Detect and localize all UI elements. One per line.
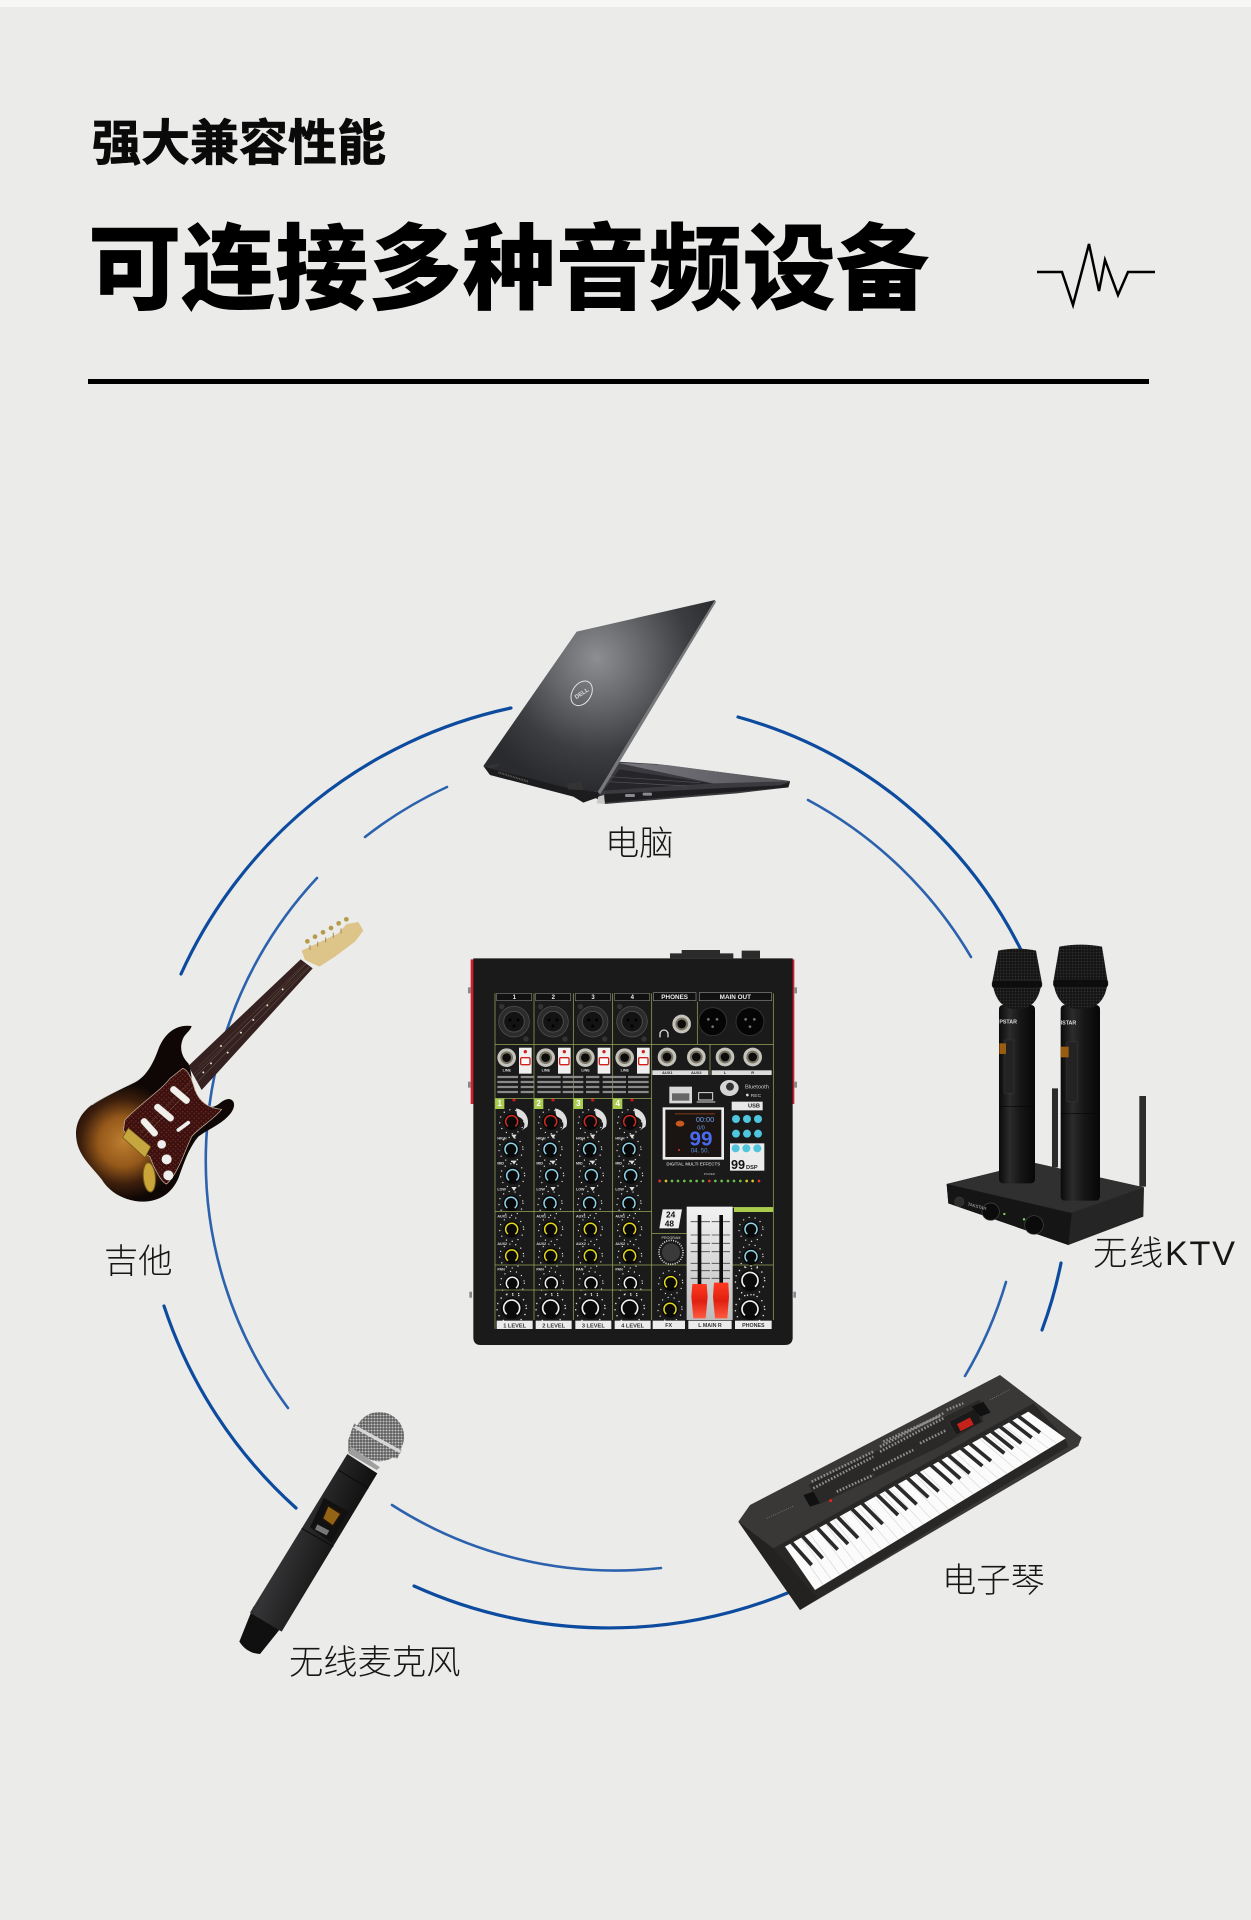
laptop keyboard: [603, 769, 712, 791]
level labels: 1 LEVEL: [503, 1323, 527, 1329]
channel control labels: [497, 1068, 630, 1272]
right microphone: ISTAR: [1061, 1021, 1076, 1027]
channel control labels: PAN: [497, 1268, 505, 1272]
level labels: 3 LEVEL: [582, 1323, 605, 1329]
channel control labels: MID: [615, 1162, 622, 1166]
channel control labels: HIGH: [615, 1136, 625, 1140]
channel control labels: MID: [497, 1162, 504, 1166]
laptop lid: [483, 600, 715, 792]
usb and bluetooth panel: REC: [751, 1093, 762, 1099]
label: electronic keyboard: 电子琴: [942, 1562, 1045, 1600]
channel number text: 4: [615, 1099, 620, 1108]
LED level meter: [658, 1172, 760, 1182]
phones and main out section: PHONES: [661, 994, 688, 1001]
cyan control buttons: 99: [731, 1158, 745, 1172]
cyan control buttons: [730, 1115, 764, 1172]
channel number text: 1: [513, 995, 517, 1001]
channel control labels: AUX1: [615, 1214, 625, 1218]
display: [949, 1408, 982, 1435]
phones and main out section: L: [724, 1070, 727, 1075]
effect parameter table: [497, 1077, 651, 1092]
24/48 badge: 48: [665, 1219, 674, 1229]
channel control labels: PAN: [615, 1268, 623, 1272]
icon: laptop logo: [567, 677, 597, 710]
speaker grilles: [767, 1389, 1010, 1518]
bottom function labels: PHONES: [742, 1323, 765, 1329]
channel control labels: LOW: [615, 1188, 624, 1192]
channel control labels: LINE: [503, 1068, 512, 1072]
label: guitar: 吉他: [104, 1243, 173, 1281]
channel control labels: AUX2: [536, 1242, 546, 1246]
keyboard body: [738, 1375, 1082, 1610]
channel control labels: MID: [576, 1162, 583, 1166]
main title: 可连接多种音频设备: [88, 217, 930, 322]
channel control labels: AUX2: [497, 1242, 507, 1246]
channel control labels: AUX1: [497, 1214, 507, 1218]
label: wireless microphone: 无线麦克风: [289, 1644, 460, 1682]
LCD display: 04. 50.: [691, 1149, 709, 1155]
LED level meter: POWER: [704, 1172, 716, 1176]
channel control labels: PAN: [576, 1268, 584, 1272]
laptop: [483, 600, 790, 804]
mixer: [468, 950, 797, 1345]
guitar strings: [140, 963, 310, 1137]
channel control labels: MID: [536, 1162, 543, 1166]
channel number text: 3: [591, 995, 595, 1001]
guitar jack plate: [142, 1162, 157, 1192]
receiver base: [947, 1163, 1144, 1245]
channel number text: 3: [576, 1099, 581, 1108]
laptop base: [593, 762, 790, 804]
LCD display: 99: [690, 1127, 712, 1150]
usb and bluetooth panel: Bluetooth: [745, 1085, 769, 1091]
connection arcs: [164, 708, 1061, 1628]
channel control labels: LINE: [542, 1068, 551, 1072]
white keys: [785, 1412, 1066, 1590]
red fader caps: [691, 1284, 708, 1318]
LCD display: [663, 1107, 724, 1160]
level labels: [503, 1323, 645, 1329]
level labels: 2 LEVEL: [542, 1323, 566, 1329]
subtitle heading: 强大兼容性能: [92, 117, 386, 171]
left microphone: [992, 949, 1042, 1183]
channel control labels: LOW: [497, 1188, 506, 1192]
wireless KTV microphones: [947, 945, 1146, 1245]
channel control labels: HIGH: [576, 1136, 585, 1140]
channel control labels: LOW: [576, 1188, 585, 1192]
channel control labels: AUX1: [536, 1214, 546, 1218]
bottom function labels: FX: [665, 1323, 673, 1329]
icon: audio pulse waveform: [1037, 244, 1155, 305]
digital multi effects caption: DIGITAL MULTI EFFECTS: [666, 1162, 720, 1167]
channel control labels: PAN: [536, 1268, 544, 1272]
mixer screws: [468, 987, 797, 1298]
black keys: [792, 1415, 1040, 1565]
channel control labels: HIGH: [536, 1136, 546, 1140]
channel control labels: LINE: [621, 1068, 630, 1072]
phones and main out section: AUX1: [662, 1070, 673, 1075]
master EQ and phones knobs: [734, 1207, 773, 1324]
label: computer: 电脑: [605, 825, 674, 863]
control panel: [808, 1399, 983, 1504]
channel control labels: HIGH: [497, 1136, 507, 1140]
microphone head: [348, 1412, 404, 1470]
fx aux knobs: [658, 1271, 683, 1321]
cyan control buttons: DSP: [746, 1165, 758, 1171]
channel number text: 1: [497, 1099, 502, 1108]
channel number text: 4: [631, 995, 635, 1001]
guitar bridge: [123, 1128, 151, 1158]
program encoder: PROGRAM: [662, 1236, 680, 1240]
guitar pickguard: [123, 1068, 222, 1184]
channel control labels: LINE: [581, 1068, 590, 1072]
laptop hinge edge: [483, 766, 600, 803]
handheld wireless microphone: [239, 1412, 404, 1654]
phones and main out section: [652, 993, 772, 1075]
mixer body: [473, 958, 793, 1345]
panel grid lines: [495, 993, 773, 1329]
guitar: [76, 917, 363, 1202]
antennas: [1052, 1088, 1146, 1187]
receiver controls: TAKSTAR: [967, 1201, 987, 1211]
channel control labels: AUX2: [576, 1242, 586, 1246]
bottom function labels: L MAIN R: [698, 1323, 722, 1329]
channel control labels: AUX2: [615, 1242, 625, 1246]
guitar knobs: [157, 1140, 173, 1180]
microphone tail: [239, 1607, 283, 1654]
main fader panel: [687, 1207, 733, 1320]
LCD display: 00:00: [696, 1115, 714, 1124]
phones and main out section: MAIN OUT: [720, 994, 751, 1001]
bottom function labels: [653, 1321, 772, 1329]
guitar pickups: [139, 1085, 191, 1138]
pitch wheels: [803, 1402, 991, 1507]
LCD display: 0/0: [697, 1125, 705, 1131]
label: wireless KTV: 无线KTV: [1093, 1235, 1235, 1273]
left microphone: PSTAR: [999, 1019, 1017, 1025]
right microphone: [1053, 945, 1108, 1201]
level labels: 4 LEVEL: [621, 1323, 645, 1329]
icon: laptop logo: DELL: [574, 687, 591, 701]
guitar headstock: [302, 922, 363, 967]
mixer connectors on top edge: [670, 950, 760, 958]
usb and bluetooth panel: USB: [748, 1104, 760, 1110]
channel number text: 2: [536, 1099, 541, 1108]
divider rule: [88, 379, 1149, 384]
guitar neck: [188, 959, 313, 1090]
laptop ports: [625, 794, 635, 797]
receiver controls: [955, 1197, 1043, 1234]
electronic keyboard: [738, 1375, 1082, 1610]
channel strips: [495, 993, 533, 1329]
usb and bluetooth panel: [669, 1080, 769, 1110]
phones and main out section: AUX2: [691, 1070, 702, 1075]
guitar body: [76, 1026, 234, 1202]
channel number text: 2: [552, 995, 556, 1001]
channel control labels: AUX1: [576, 1214, 586, 1218]
phones and main out section: R: [751, 1070, 754, 1075]
microphone display: [310, 1498, 348, 1543]
microphone body: [250, 1454, 377, 1632]
mixer red side rails: [471, 959, 794, 1104]
channel number text: [497, 995, 635, 1108]
channel control labels: LOW: [536, 1188, 545, 1192]
program encoder: [659, 1236, 683, 1264]
24/48 badge: 24: [666, 1210, 676, 1220]
24/48 badge: [659, 1209, 682, 1229]
